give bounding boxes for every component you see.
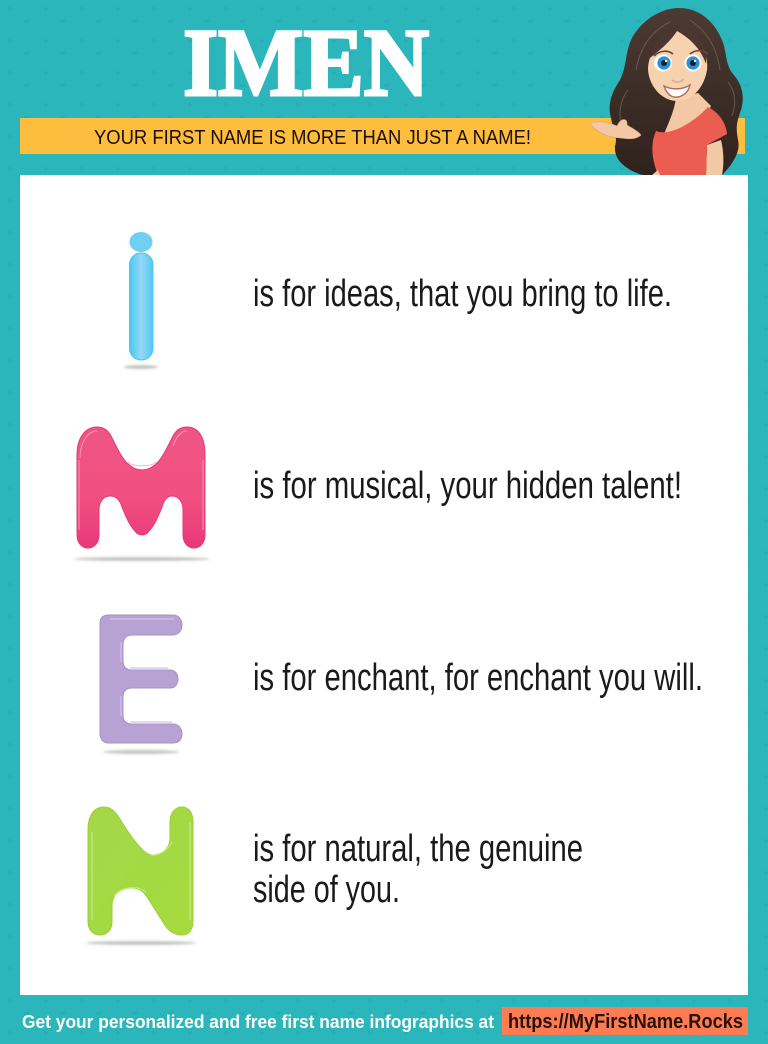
row 3: letter E	[100, 615, 703, 754]
hair	[610, 8, 743, 175]
white content panel	[20, 175, 748, 995]
footer text: Get your personalized and free first name infographics at	[22, 1011, 494, 1032]
face	[648, 31, 707, 101]
row 1: letter I	[124, 232, 672, 369]
text: n: is for natural, the genuine	[253, 828, 583, 870]
footer	[22, 1007, 748, 1035]
icon: pink letter M	[74, 427, 210, 561]
banner text: YOUR FIRST NAME IS MORE THAN JUST A NAME!	[94, 126, 531, 149]
right arm	[706, 140, 723, 175]
row 4: letter N	[86, 807, 583, 945]
left forearm	[642, 170, 660, 175]
hair highlights	[620, 20, 735, 128]
left open hand	[590, 120, 641, 139]
eyes	[654, 54, 702, 72]
title: IMEN	[183, 9, 429, 116]
text: n	[253, 828, 583, 911]
icon: purple letter E	[100, 615, 182, 754]
nose	[672, 79, 684, 82]
neck and chest	[664, 93, 711, 134]
icon: blue letter i	[124, 232, 158, 369]
hair parting	[650, 26, 706, 64]
text: n: side of you.	[253, 869, 400, 911]
eyebrows	[654, 51, 708, 56]
yellow banner	[20, 118, 745, 154]
red top	[652, 107, 727, 175]
row 2: letter M	[74, 427, 682, 561]
url badge: https://MyFirstName.Rocks	[508, 1011, 743, 1033]
smile	[664, 85, 690, 97]
icon: green letter N	[86, 807, 196, 945]
illustration: woman with long brown hair	[590, 8, 743, 175]
